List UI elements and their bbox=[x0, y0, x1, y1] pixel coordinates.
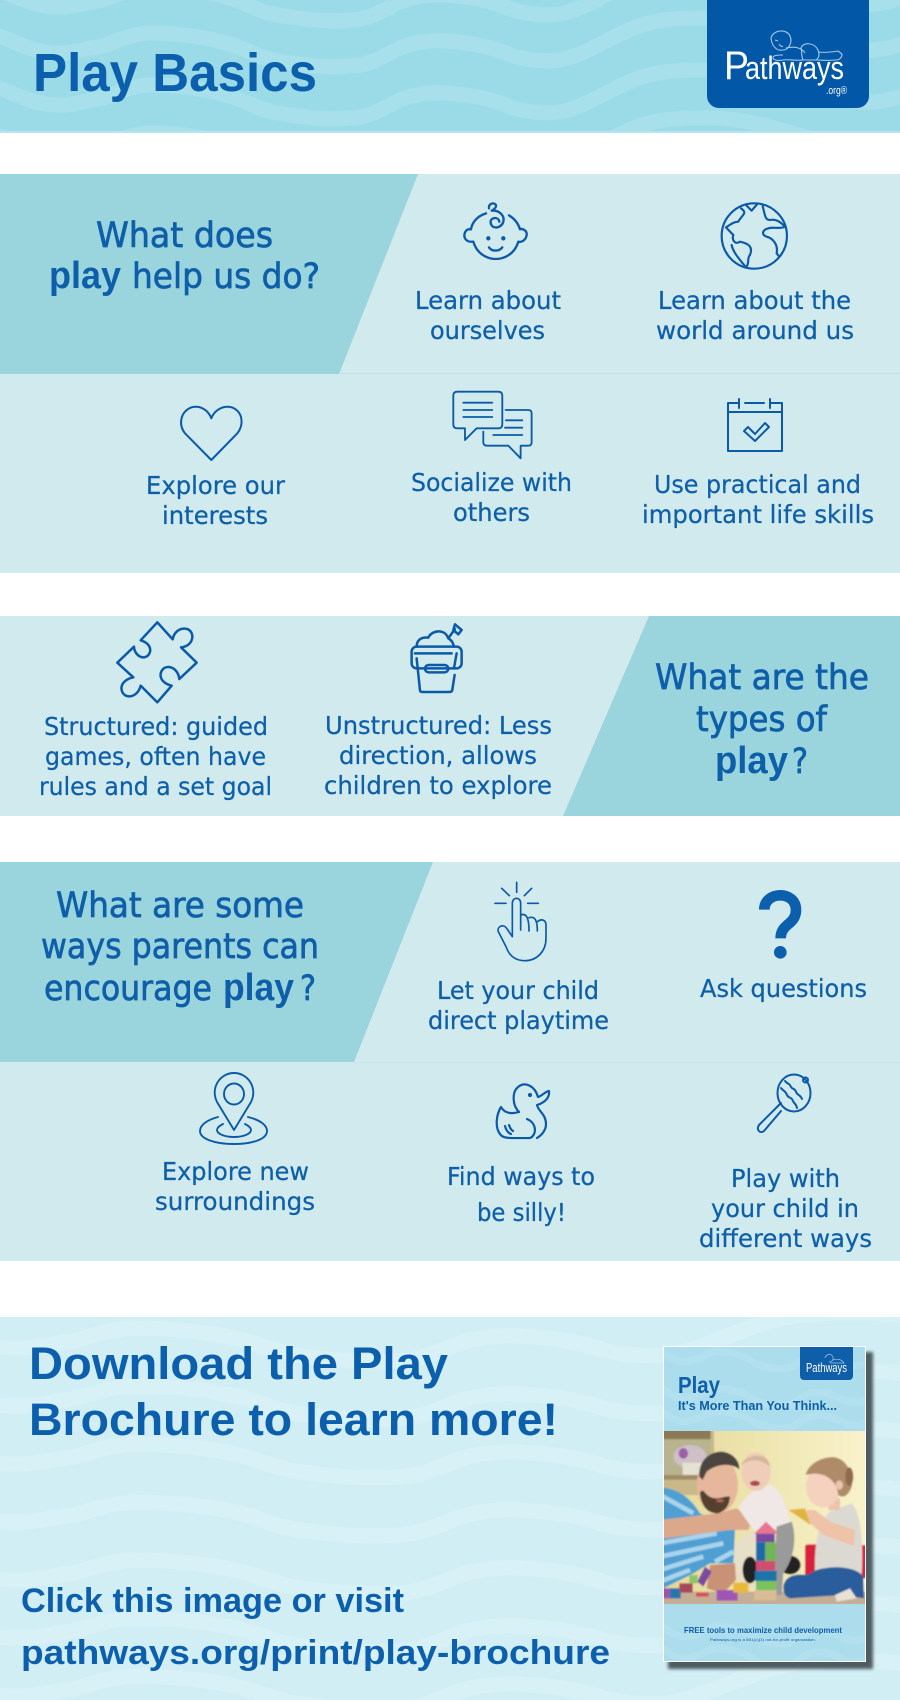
item: learn about the world bbox=[656, 203, 854, 345]
item: play in different ways: your child in bbox=[711, 1194, 859, 1223]
item: explore new surroundings bbox=[155, 1073, 315, 1216]
heading: What are some bbox=[56, 886, 304, 926]
heading: download the brochure bbox=[29, 1338, 558, 1445]
icon: speech bubbles bbox=[453, 392, 532, 458]
heading: download the brochure: Download the Play bbox=[29, 1338, 448, 1389]
icon: sand bucket bbox=[412, 624, 462, 692]
heading: ? bbox=[300, 969, 316, 1009]
panel: how parents can encourage play bbox=[0, 862, 900, 1261]
text: link to brochure: Click this image or visit bbox=[21, 1582, 404, 1620]
heading: play bbox=[223, 967, 294, 1009]
heading: types of bbox=[696, 700, 828, 740]
heading: download the brochure: Brochure to learn more! bbox=[29, 1394, 558, 1445]
heading: help us do? bbox=[132, 257, 320, 297]
text: link to brochure: pathways.org/print/play-brochure bbox=[21, 1634, 610, 1672]
icon: question mark bbox=[764, 895, 796, 959]
icon: map pin bbox=[200, 1073, 267, 1144]
item: unstructured play: direction, allows bbox=[339, 741, 537, 770]
icon: heart bbox=[181, 407, 242, 460]
item: explore our interests: Explore our bbox=[146, 471, 286, 500]
item: play in different ways: Play with bbox=[731, 1164, 840, 1193]
icon: globe bbox=[722, 203, 787, 269]
item: find ways to be silly bbox=[447, 1084, 595, 1227]
logo: Pathways.org: .org® bbox=[826, 85, 847, 97]
item: explore our interests: interests bbox=[162, 501, 268, 530]
item: socialize with others: Socialize with bbox=[411, 468, 572, 497]
item: structured play: rules and a set goal bbox=[39, 772, 272, 801]
heading: encourage bbox=[44, 969, 212, 1009]
text: link to brochure bbox=[21, 1582, 610, 1672]
item: use practical life skills: important life skills bbox=[642, 500, 874, 529]
item: let your child direct playtime: direct playtime bbox=[428, 1006, 609, 1035]
heading: play bbox=[49, 255, 121, 297]
item: learn about ourselves: Learn about bbox=[415, 286, 561, 315]
brochure fine print: Pathways.org is a 501(c)(3) not-for-profit organization. bbox=[710, 1638, 816, 1642]
item: use practical life skills: Use practical and bbox=[654, 470, 861, 499]
item: let your child direct playtime bbox=[428, 882, 609, 1035]
item: use practical life skills bbox=[642, 399, 874, 529]
heading bbox=[49, 216, 320, 297]
item: find ways to be silly: be silly! bbox=[477, 1198, 566, 1227]
logo: Pathways.org: P bbox=[724, 44, 749, 88]
item: learn about ourselves: ourselves bbox=[430, 316, 545, 345]
item: play in different ways: different ways bbox=[699, 1224, 872, 1253]
item: let your child direct playtime: Let your child bbox=[437, 976, 599, 1005]
item: unstructured play: children to explore bbox=[324, 771, 552, 800]
item: learn about ourselves bbox=[415, 203, 561, 345]
icon: rubber duck bbox=[497, 1084, 549, 1138]
item: explore new surroundings: surroundings bbox=[155, 1187, 315, 1216]
item: learn about the world: Learn about the bbox=[658, 286, 851, 315]
item: ask questions: Ask questions bbox=[700, 974, 867, 1003]
heading bbox=[41, 886, 319, 1009]
item: socialize with others bbox=[411, 392, 572, 527]
brochure subtitle: It's More Than You Think... bbox=[678, 1399, 837, 1413]
icon: tapping hand bbox=[495, 882, 546, 961]
heading: ways parents can bbox=[41, 927, 319, 967]
panel: what does play help us do bbox=[0, 174, 900, 573]
heading: ? bbox=[792, 742, 808, 782]
item: unstructured play bbox=[324, 624, 552, 800]
item: explore new surroundings: Explore new bbox=[162, 1157, 309, 1186]
brochure tagline: FREE tools to maximize child development bbox=[684, 1625, 842, 1635]
icon: rattle bbox=[758, 1074, 810, 1132]
brochure title: Play bbox=[678, 1372, 720, 1398]
panel: types of play bbox=[0, 616, 900, 816]
icon: puzzle piece bbox=[117, 622, 197, 702]
item: explore our interests bbox=[146, 407, 286, 530]
panel: header banner bbox=[0, 0, 900, 133]
item: structured play: Structured: guided bbox=[44, 712, 268, 741]
brochure logo bbox=[800, 1347, 853, 1380]
heading: What are the bbox=[655, 658, 869, 698]
heading bbox=[655, 658, 869, 782]
icon: baby face bbox=[464, 203, 527, 259]
item: find ways to be silly: Find ways to bbox=[447, 1162, 595, 1191]
item: unstructured play: Unstructured: Less bbox=[325, 711, 552, 740]
item: ask questions bbox=[700, 895, 867, 1003]
logo: Pathways.org bbox=[707, 0, 869, 108]
heading: What does bbox=[96, 216, 273, 256]
title: Play Basics bbox=[33, 43, 317, 103]
heading: play bbox=[715, 740, 788, 782]
item: structured play bbox=[39, 622, 272, 801]
brochure cover image bbox=[663, 1346, 876, 1672]
item: play in different ways bbox=[699, 1074, 872, 1253]
item: learn about the world: world around us bbox=[656, 316, 854, 345]
item: socialize with others: others bbox=[453, 498, 530, 527]
brochure photo bbox=[660, 1427, 870, 1607]
logo: Pathways.org: athways bbox=[745, 50, 844, 86]
icon: calendar bbox=[728, 399, 782, 451]
brochure logo: Pathways bbox=[806, 1360, 847, 1375]
item: structured play: games, often have bbox=[45, 742, 266, 771]
panel: download call to action bbox=[0, 1313, 900, 1700]
